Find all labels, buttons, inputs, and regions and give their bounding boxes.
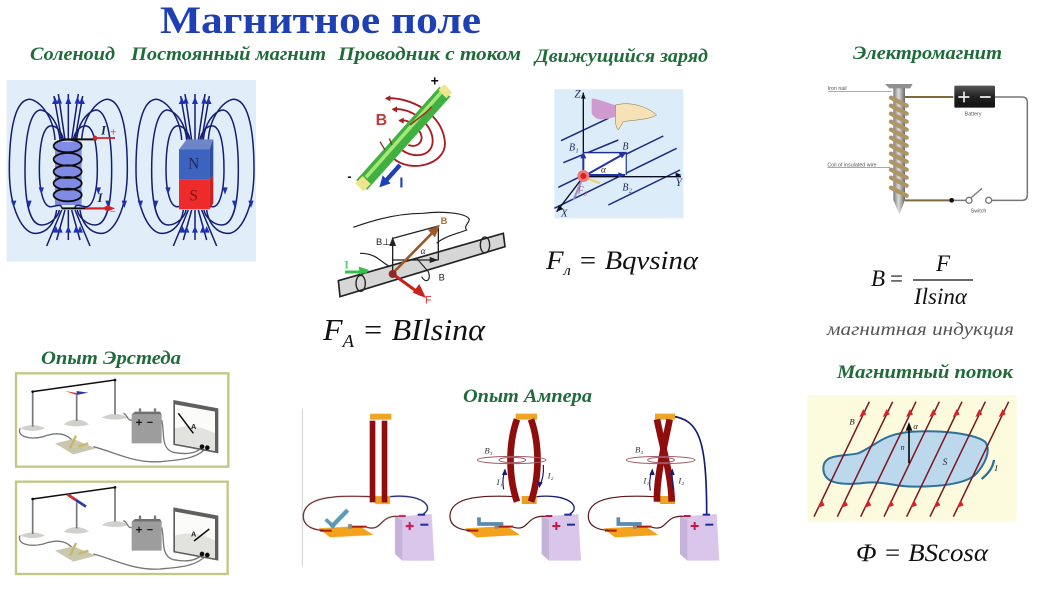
title: Магнитное поле: [160, 0, 481, 42]
axes and vectors: F₃: [577, 185, 588, 196]
flux loop: B: [849, 416, 855, 426]
caption: magnetic induction: магнитная индукция: [826, 319, 1014, 339]
flux loop: S: [943, 458, 948, 468]
axes and vectors: X: [560, 209, 568, 220]
flux loop: [814, 402, 1009, 517]
setup 3: B₃: [635, 445, 643, 455]
nail with coil: [885, 84, 913, 214]
ammeter pointer: [194, 529, 209, 541]
setup 2: I₂: [547, 470, 554, 480]
heading: Ampere experiment: Опыт Ампера: [463, 386, 593, 407]
formula: magnetic induction: Ilsinα: [913, 284, 968, 309]
conductor and field: B: [376, 112, 387, 129]
left-hand rule: B: [439, 273, 445, 283]
labels: Iron nail: [828, 86, 847, 92]
heading: permanent magnet: Постоянный магнит: [130, 44, 326, 65]
left-hand rule: α: [421, 247, 427, 257]
compass needle: [67, 494, 86, 507]
panel: Oersted experiment, open circuit: [16, 373, 228, 467]
circuit: [905, 86, 1027, 203]
axes and vectors: Y: [676, 177, 684, 189]
setup 3: I₂: [677, 475, 684, 485]
axes and vectors: Z: [574, 88, 581, 100]
setup 1: [303, 417, 434, 561]
heading: Oersted experiment: Опыт Эрстеда: [41, 348, 182, 369]
setup 3: [588, 416, 719, 561]
heading: magnetic flux: Магнитный поток: [836, 362, 1014, 383]
formula: magnetic flux: Φ = BScosα: [856, 540, 989, 567]
axes and vectors: [554, 88, 684, 220]
setup 2: I₁: [496, 477, 503, 487]
permanent magnet diagram: S: [189, 188, 198, 205]
formula: Ampere force: A: [342, 331, 355, 351]
panel: magnetic flux: [807, 395, 1017, 522]
axes and vectors: B₁: [569, 143, 579, 154]
left-hand rule: [338, 212, 505, 306]
panel: electromagnet: [827, 84, 1027, 214]
solenoid diagram: +: [110, 126, 116, 138]
formula: magnetic induction: [871, 251, 973, 309]
labels: [827, 86, 986, 214]
panel: conductor with current: [338, 72, 505, 306]
permanent magnet diagram: N: [188, 155, 199, 172]
panel: Ampere experiment: [302, 408, 719, 567]
heading: electromagnet: Электромагнит: [853, 43, 1002, 64]
solenoid diagram: [9, 94, 127, 246]
left-hand rule: B⊥: [376, 237, 390, 247]
axes and vectors: B: [622, 141, 628, 152]
formula: Lorentz force: = Bqvsinα: [571, 246, 699, 275]
setup 3: I₁: [642, 475, 649, 485]
formula: magnetic induction: B: [871, 266, 885, 291]
heading: solenoid: Соленоид: [30, 44, 115, 65]
formula: Lorentz force: F: [545, 246, 565, 275]
conductor and field: [347, 72, 448, 191]
compass needle: [65, 391, 77, 395]
panel: moving charge: [554, 88, 684, 220]
solenoid diagram: I: [97, 191, 104, 205]
formula: Lorentz force: л: [562, 263, 571, 279]
flux loop: n: [901, 443, 905, 452]
panel: solenoid and permanent magnet fields: [7, 80, 256, 262]
left-hand rule: F: [425, 294, 432, 306]
permanent magnet diagram: [136, 94, 254, 246]
solenoid diagram: I: [100, 124, 107, 138]
labels: Switch: [971, 208, 986, 214]
panel: Oersted experiment, closed circuit: [16, 482, 228, 574]
flux loop: α: [913, 421, 918, 431]
left-hand rule: I: [344, 260, 349, 272]
axes and vectors: α: [601, 166, 607, 176]
axes and vectors: B₂: [622, 183, 632, 194]
conductor and field: +: [431, 72, 439, 88]
conductor and field: I: [399, 175, 403, 191]
heading: moving charge: Движущийся заряд: [533, 46, 708, 67]
solenoid diagram: –: [110, 206, 116, 216]
ammeter pointer: [178, 413, 193, 433]
conductor and field: -: [347, 170, 352, 184]
formula: Ampere force: F: [322, 312, 344, 347]
flux loop: I: [994, 463, 999, 473]
labels: Coil of insulated wire: [827, 162, 877, 168]
left-hand rule: B: [441, 216, 448, 226]
setup 2: B₃: [484, 445, 493, 455]
formula: magnetic induction: F: [935, 251, 951, 276]
formula: magnetic induction: =: [890, 266, 903, 291]
labels: Battery: [965, 112, 982, 118]
heading: current conductor: Проводник с током: [337, 44, 521, 65]
setup 2: [450, 417, 581, 561]
formula: Ampere force: = BIlsinα: [354, 312, 486, 347]
